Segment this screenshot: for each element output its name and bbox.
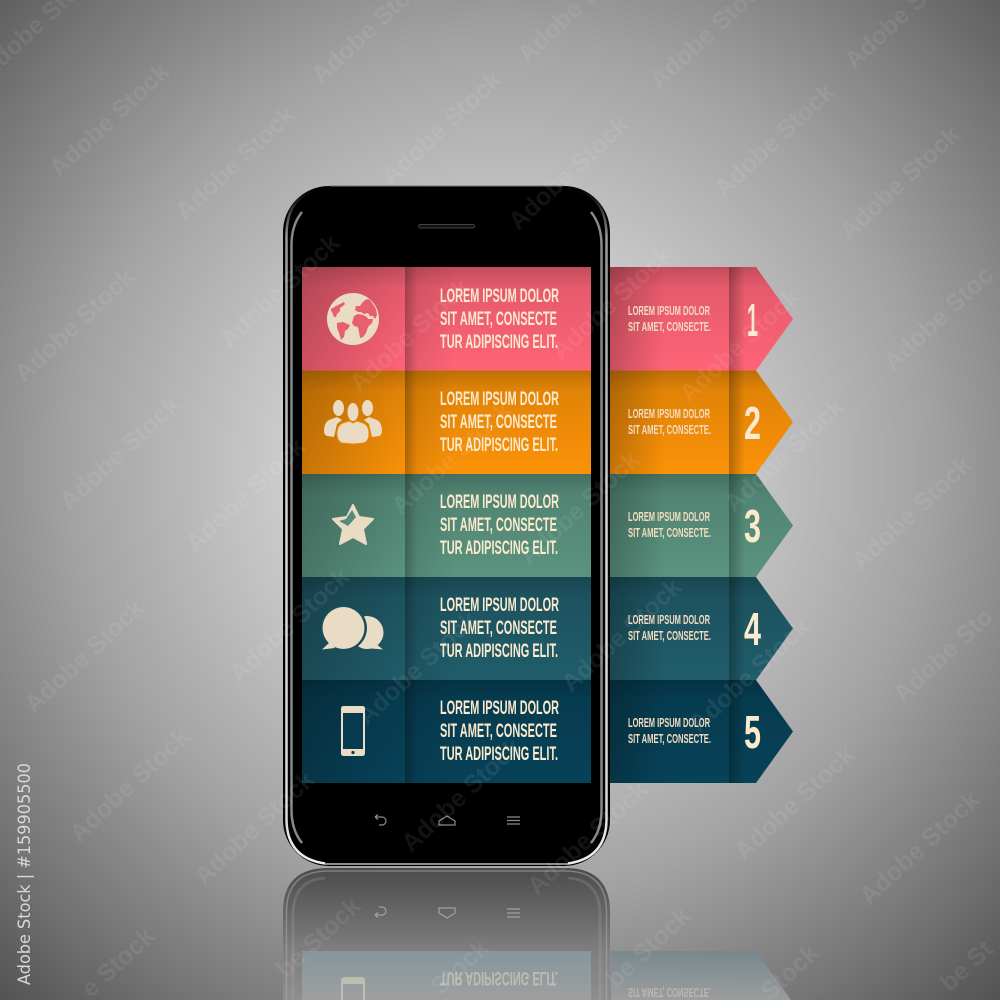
text block: LOREM IPSUM DOLOR (440, 492, 559, 513)
text block: SIT AMET, CONSECTE (440, 515, 557, 536)
text block (440, 698, 559, 765)
watermarks: Adobe Stock (352, 606, 483, 730)
text block: TUR ADIPISCING ELIT. (440, 435, 558, 456)
arrow 5 (605, 680, 793, 783)
watermarks: be St (935, 935, 999, 997)
text block (440, 286, 559, 353)
text block: TUR ADIPISCING ELIT. (440, 332, 558, 353)
arrow 5: 5 (744, 706, 761, 758)
watermarks: Adobe Stock (214, 229, 345, 353)
arrow 4: SIT AMET, CONSECTE. (628, 629, 711, 643)
watermarks: Adobe Stock (376, 66, 507, 190)
watermarks: Adobe Stock (674, 283, 805, 407)
watermarks: Adobe Stock (396, 733, 527, 857)
arrow 2 (605, 370, 793, 474)
text block: SIT AMET, CONSECTE (440, 309, 557, 330)
watermarks: Adobe Stock (834, 121, 965, 245)
arrow 5: LOREM IPSUM DOLOR (628, 716, 710, 730)
phone (283, 186, 610, 866)
phone edge highlights (286, 186, 606, 864)
row 3 (302, 474, 591, 577)
text block (440, 595, 559, 662)
watermarks: Adobe Stock (546, 241, 677, 365)
text block: SIT AMET, CONSECTE (440, 618, 557, 639)
watermarks: Adobe Stock (709, 78, 840, 202)
reflection of phone and arrows (283, 868, 791, 1000)
text block: SIT AMET, CONSECTE (440, 412, 557, 433)
watermarks: Adobe Stock (386, 396, 517, 520)
text block: TUR ADIPISCING ELIT. (440, 641, 558, 662)
speaker (418, 224, 474, 228)
text block: LOREM IPSUM DOLOR (440, 389, 559, 410)
watermarks: Adobe Stock (684, 613, 815, 737)
watermarks: Adobe Stock (180, 433, 311, 557)
watermarks: Adobe Stock (503, 111, 634, 235)
watermarks: Adobe Stock (514, 446, 645, 570)
watermarks: Adobe Stock (44, 58, 175, 182)
watermarks: Adobe Stock (846, 451, 977, 575)
watermarks: Stock (425, 934, 494, 1000)
text block (440, 492, 559, 559)
watermarks: Adobe Stock (64, 723, 195, 847)
panel: side arrows (605, 267, 793, 783)
watermarks: be Stock (601, 902, 696, 993)
watermarks: Adobe Stock (170, 101, 301, 225)
arrow 4: LOREM IPSUM DOLOR (628, 613, 710, 627)
icon: smartphone (341, 706, 365, 756)
arrow 2: LOREM IPSUM DOLOR (628, 407, 710, 421)
icon: speech bubbles (321, 605, 384, 651)
text block: LOREM IPSUM DOLOR (440, 595, 559, 616)
row 4 (302, 577, 591, 680)
arrow 3: SIT AMET, CONSECTE. (628, 526, 711, 540)
watermarks: Adobe Stock (556, 573, 687, 697)
row 1 (302, 267, 591, 371)
arrow 3 (605, 474, 793, 577)
arrow 3: 3 (744, 500, 761, 552)
row 5 (302, 680, 591, 783)
watermarks: Adobe Stock (224, 563, 355, 687)
text block: LOREM IPSUM DOLOR (440, 698, 559, 719)
row 2 (302, 370, 591, 474)
watermarks: Adobe Stoc (878, 261, 999, 376)
text block: TUR ADIPISCING ELIT. (440, 538, 558, 559)
panel: screen rows (302, 267, 591, 783)
text block: TUR ADIPISCING ELIT. (440, 744, 558, 765)
watermarks: Adobe Stock (344, 273, 475, 397)
phone body (283, 186, 610, 866)
stock id label: Adobe Stock | #159905500 (15, 763, 35, 985)
watermarks: Adobe Stock (854, 786, 985, 910)
arrow 2: SIT AMET, CONSECTE. (628, 423, 711, 437)
arrow 1 (605, 267, 793, 370)
arrow 4: 4 (744, 603, 761, 655)
icon: globe (327, 293, 379, 345)
watermarks: Adobe Stock (719, 393, 850, 517)
arrow 3: LOREM IPSUM DOLOR (628, 510, 710, 524)
watermarks: Adobe Stock (522, 776, 653, 900)
icon: people (324, 400, 382, 444)
arrow 2: 2 (744, 397, 761, 449)
text block: LOREM IPSUM DOLOR (440, 286, 559, 307)
arrow 5: SIT AMET, CONSECTE. (628, 732, 711, 746)
watermarks: Adobe Stock (729, 741, 860, 865)
arrow 4 (605, 577, 793, 680)
arrow 1: SIT AMET, CONSECTE. (628, 320, 711, 334)
reflection of phone and arrows: SIT AMET, CONSECTE. (628, 985, 711, 999)
watermarks: Adobe Sto (888, 603, 999, 708)
watermarks: Adobe Stock (19, 594, 150, 718)
watermarks: Adobe Stock (54, 391, 185, 515)
text block (440, 389, 559, 456)
text block: SIT AMET, CONSECTE (440, 721, 557, 742)
phone navigation buttons (375, 814, 520, 825)
watermarks: Adobe Stock (189, 766, 320, 890)
reflection of phone and arrows: TUR ADIPISCING ELIT. (440, 967, 558, 988)
arrow 1: LOREM IPSUM DOLOR (628, 304, 710, 318)
watermarks: Adobe Stock (9, 263, 140, 387)
icon: star (333, 505, 373, 544)
arrow 1: 1 (747, 294, 758, 346)
watermarks: be Stock (271, 892, 366, 983)
